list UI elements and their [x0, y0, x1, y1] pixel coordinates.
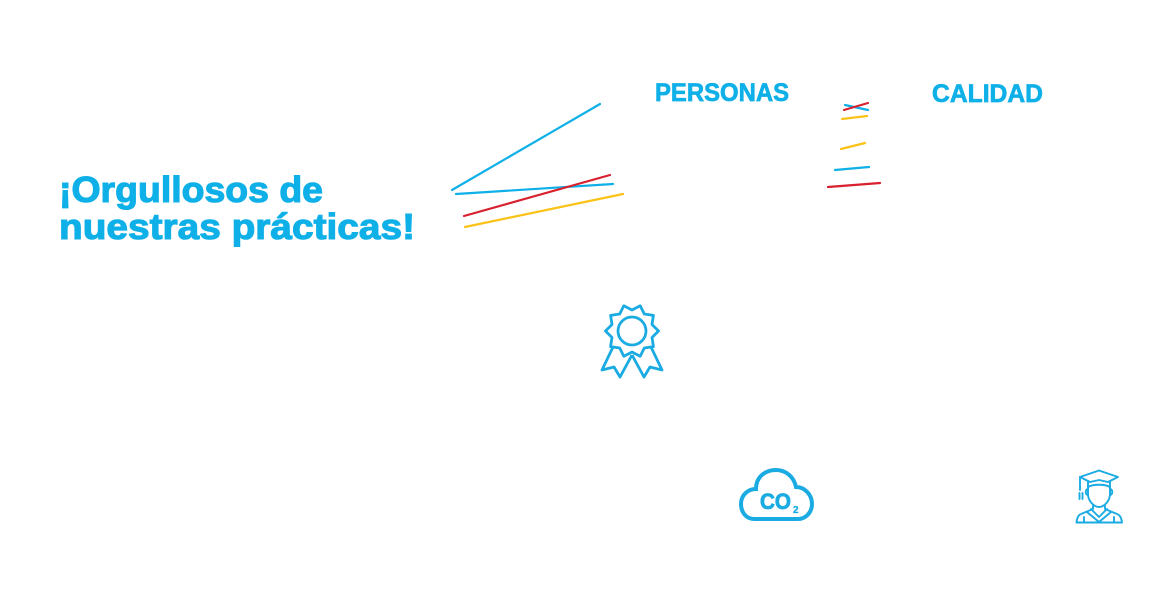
heading: personas: PERSONAS [655, 79, 789, 107]
heading: calidad: CALIDAD [932, 80, 1043, 108]
icon: CO2 cloud: 2 [793, 505, 799, 516]
icon: CO2 cloud: CO [760, 489, 791, 514]
title: ¡Orgullosos de [59, 169, 323, 210]
icon: award ribbon [602, 306, 662, 377]
icon: graduate [1076, 470, 1122, 522]
lines: calidad strokes [828, 103, 880, 187]
icon: CO2 cloud [741, 470, 812, 519]
title: nuestras prácticas! [59, 206, 415, 247]
title [59, 169, 415, 247]
lines: personas strokes [452, 104, 623, 227]
